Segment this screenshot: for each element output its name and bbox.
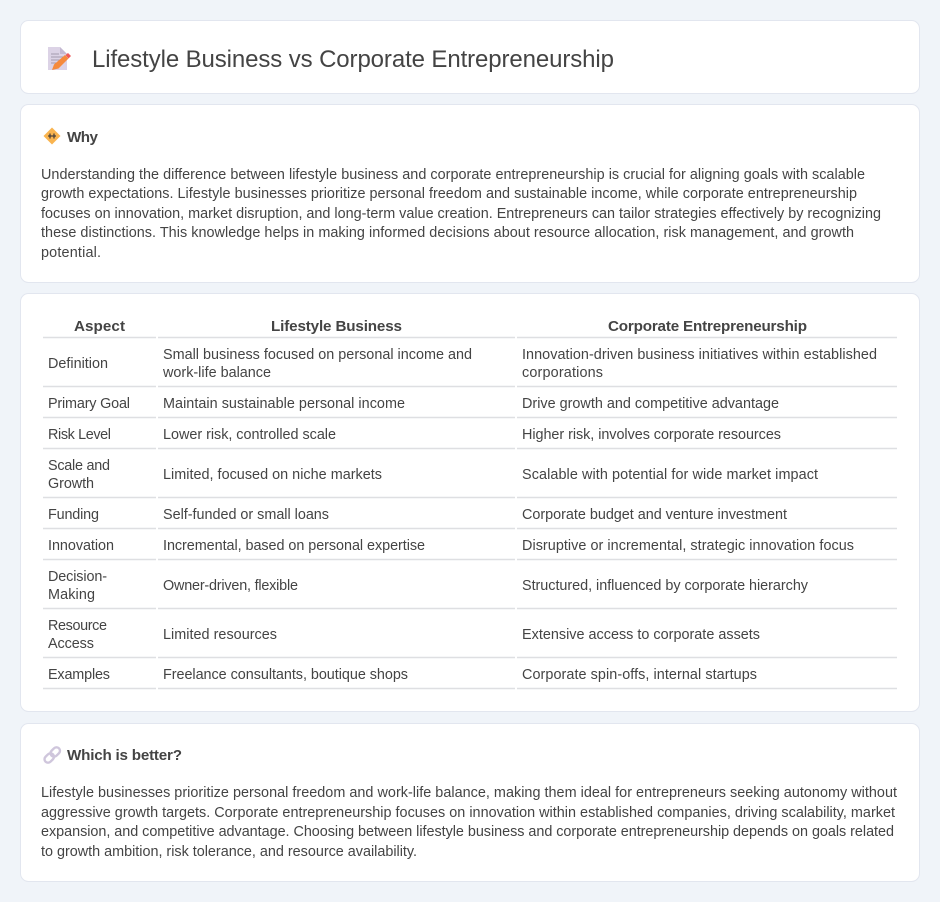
row: scale and growth: Scalable with potential for wide market impact: [522, 467, 818, 483]
icon: chain link: [43, 746, 61, 764]
text block: why paragraph: [41, 167, 881, 261]
text block: which is better paragraph: aggressive growth targets. Corporate entrepreneurship focuses on innovation within established companies, driving scalability, market: [41, 805, 895, 821]
row: funding: Self-funded or small loans: [163, 507, 329, 523]
row: funding: Corporate budget and venture investment: [522, 507, 787, 523]
text block: why paragraph: potential.: [41, 245, 101, 261]
row: examples: Examples: [48, 667, 110, 683]
icon: warning diamond: [44, 128, 60, 144]
row: resource access: Access: [48, 636, 94, 652]
row: risk level: Lower risk, controlled scale: [163, 427, 336, 443]
text block: why paragraph: Understanding the difference between lifestyle business and corporate entrepreneurship is crucial for aligning goals with scalable: [41, 167, 865, 183]
icon: document with pencil: [48, 47, 71, 70]
row: decision-making: Making: [48, 587, 95, 603]
row: innovation: Incremental, based on personal expertise: [163, 538, 425, 554]
row: decision-making: [48, 569, 809, 603]
row: innovation: [48, 538, 854, 554]
row: examples: Freelance consultants, boutique shops: [163, 667, 408, 683]
row: primary goal: Primary Goal: [48, 396, 130, 412]
text block: which is better paragraph: [41, 785, 897, 860]
row: funding: Funding: [48, 507, 99, 523]
row: primary goal: Maintain sustainable personal income: [163, 396, 405, 412]
row: resource access: Extensive access to corporate assets: [522, 627, 760, 643]
panel: comparison table: [20, 294, 920, 712]
table header row: Aspect: [74, 318, 125, 335]
panel: title header: [20, 20, 920, 94]
panel: why: [20, 104, 920, 282]
row: definition: [48, 347, 877, 381]
heading: which is better: Which is better?: [67, 747, 182, 764]
title: Lifestyle Business vs Corporate Entrepreneurship: [92, 46, 614, 73]
row: examples: Corporate spin-offs, internal startups: [522, 667, 757, 683]
table header row: Corporate Entrepreneurship: [608, 318, 807, 335]
text block: why paragraph: focuses on innovation, market disruption, and long-term value creation. Entrepreneurs can tailor strategies effectively by recognizing: [41, 206, 881, 222]
row: examples: [48, 667, 757, 683]
row: funding: [48, 507, 787, 523]
text block: which is better paragraph: Lifestyle businesses prioritize personal freedom and work-life balance, making them ideal for entrepreneurs seeking autonomy without: [41, 785, 897, 801]
row: primary goal: Drive growth and competitive advantage: [522, 396, 779, 412]
row: scale and growth: [48, 458, 818, 492]
row: risk level: Risk Level: [48, 427, 111, 443]
row: definition: work-life balance: [162, 365, 271, 381]
row: risk level: [48, 427, 781, 443]
row: scale and growth: Limited, focused on niche markets: [163, 467, 382, 483]
row: definition: Small business focused on personal income and: [163, 347, 472, 363]
row: risk level: Higher risk, involves corporate resources: [522, 427, 781, 443]
row: scale and growth: Scale and: [48, 458, 110, 474]
row: definition: corporations: [522, 365, 603, 381]
table header row: [74, 318, 807, 335]
row: resource access: Resource: [48, 618, 107, 634]
table header row: Lifestyle Business: [271, 318, 402, 335]
heading: why: Why: [67, 129, 99, 146]
text block: which is better paragraph: expansion, and competitive advantage. Choosing between lifestyle business and corporate entrepreneurship depends on goals related: [41, 824, 894, 840]
row: definition: Innovation-driven business initiatives within established: [522, 347, 877, 363]
row: primary goal: [48, 396, 779, 412]
row: decision-making: Structured, influenced by corporate hierarchy: [522, 578, 809, 594]
text block: why paragraph: growth expectations. Lifestyle businesses prioritize personal freedom and sustainable income, while corporate entrepreneurship: [41, 186, 857, 202]
row: resource access: Limited resources: [163, 627, 277, 643]
row: resource access: [48, 618, 760, 652]
text block: why paragraph: these distinctions. This knowledge helps in making informed decisions about resource allocation, risk management, and growth: [41, 225, 854, 241]
row: decision-making: Decision-: [48, 569, 107, 585]
row: innovation: Disruptive or incremental, strategic innovation focus: [522, 538, 854, 554]
row: decision-making: Owner-driven, flexible: [163, 578, 298, 594]
row: definition: Definition: [48, 356, 108, 372]
row: innovation: Innovation: [48, 538, 114, 554]
row: scale and growth: Growth: [48, 476, 94, 492]
panel: which is better: [20, 724, 920, 882]
text block: which is better paragraph: to growth ambition, risk tolerance, and resource availability.: [41, 844, 417, 860]
